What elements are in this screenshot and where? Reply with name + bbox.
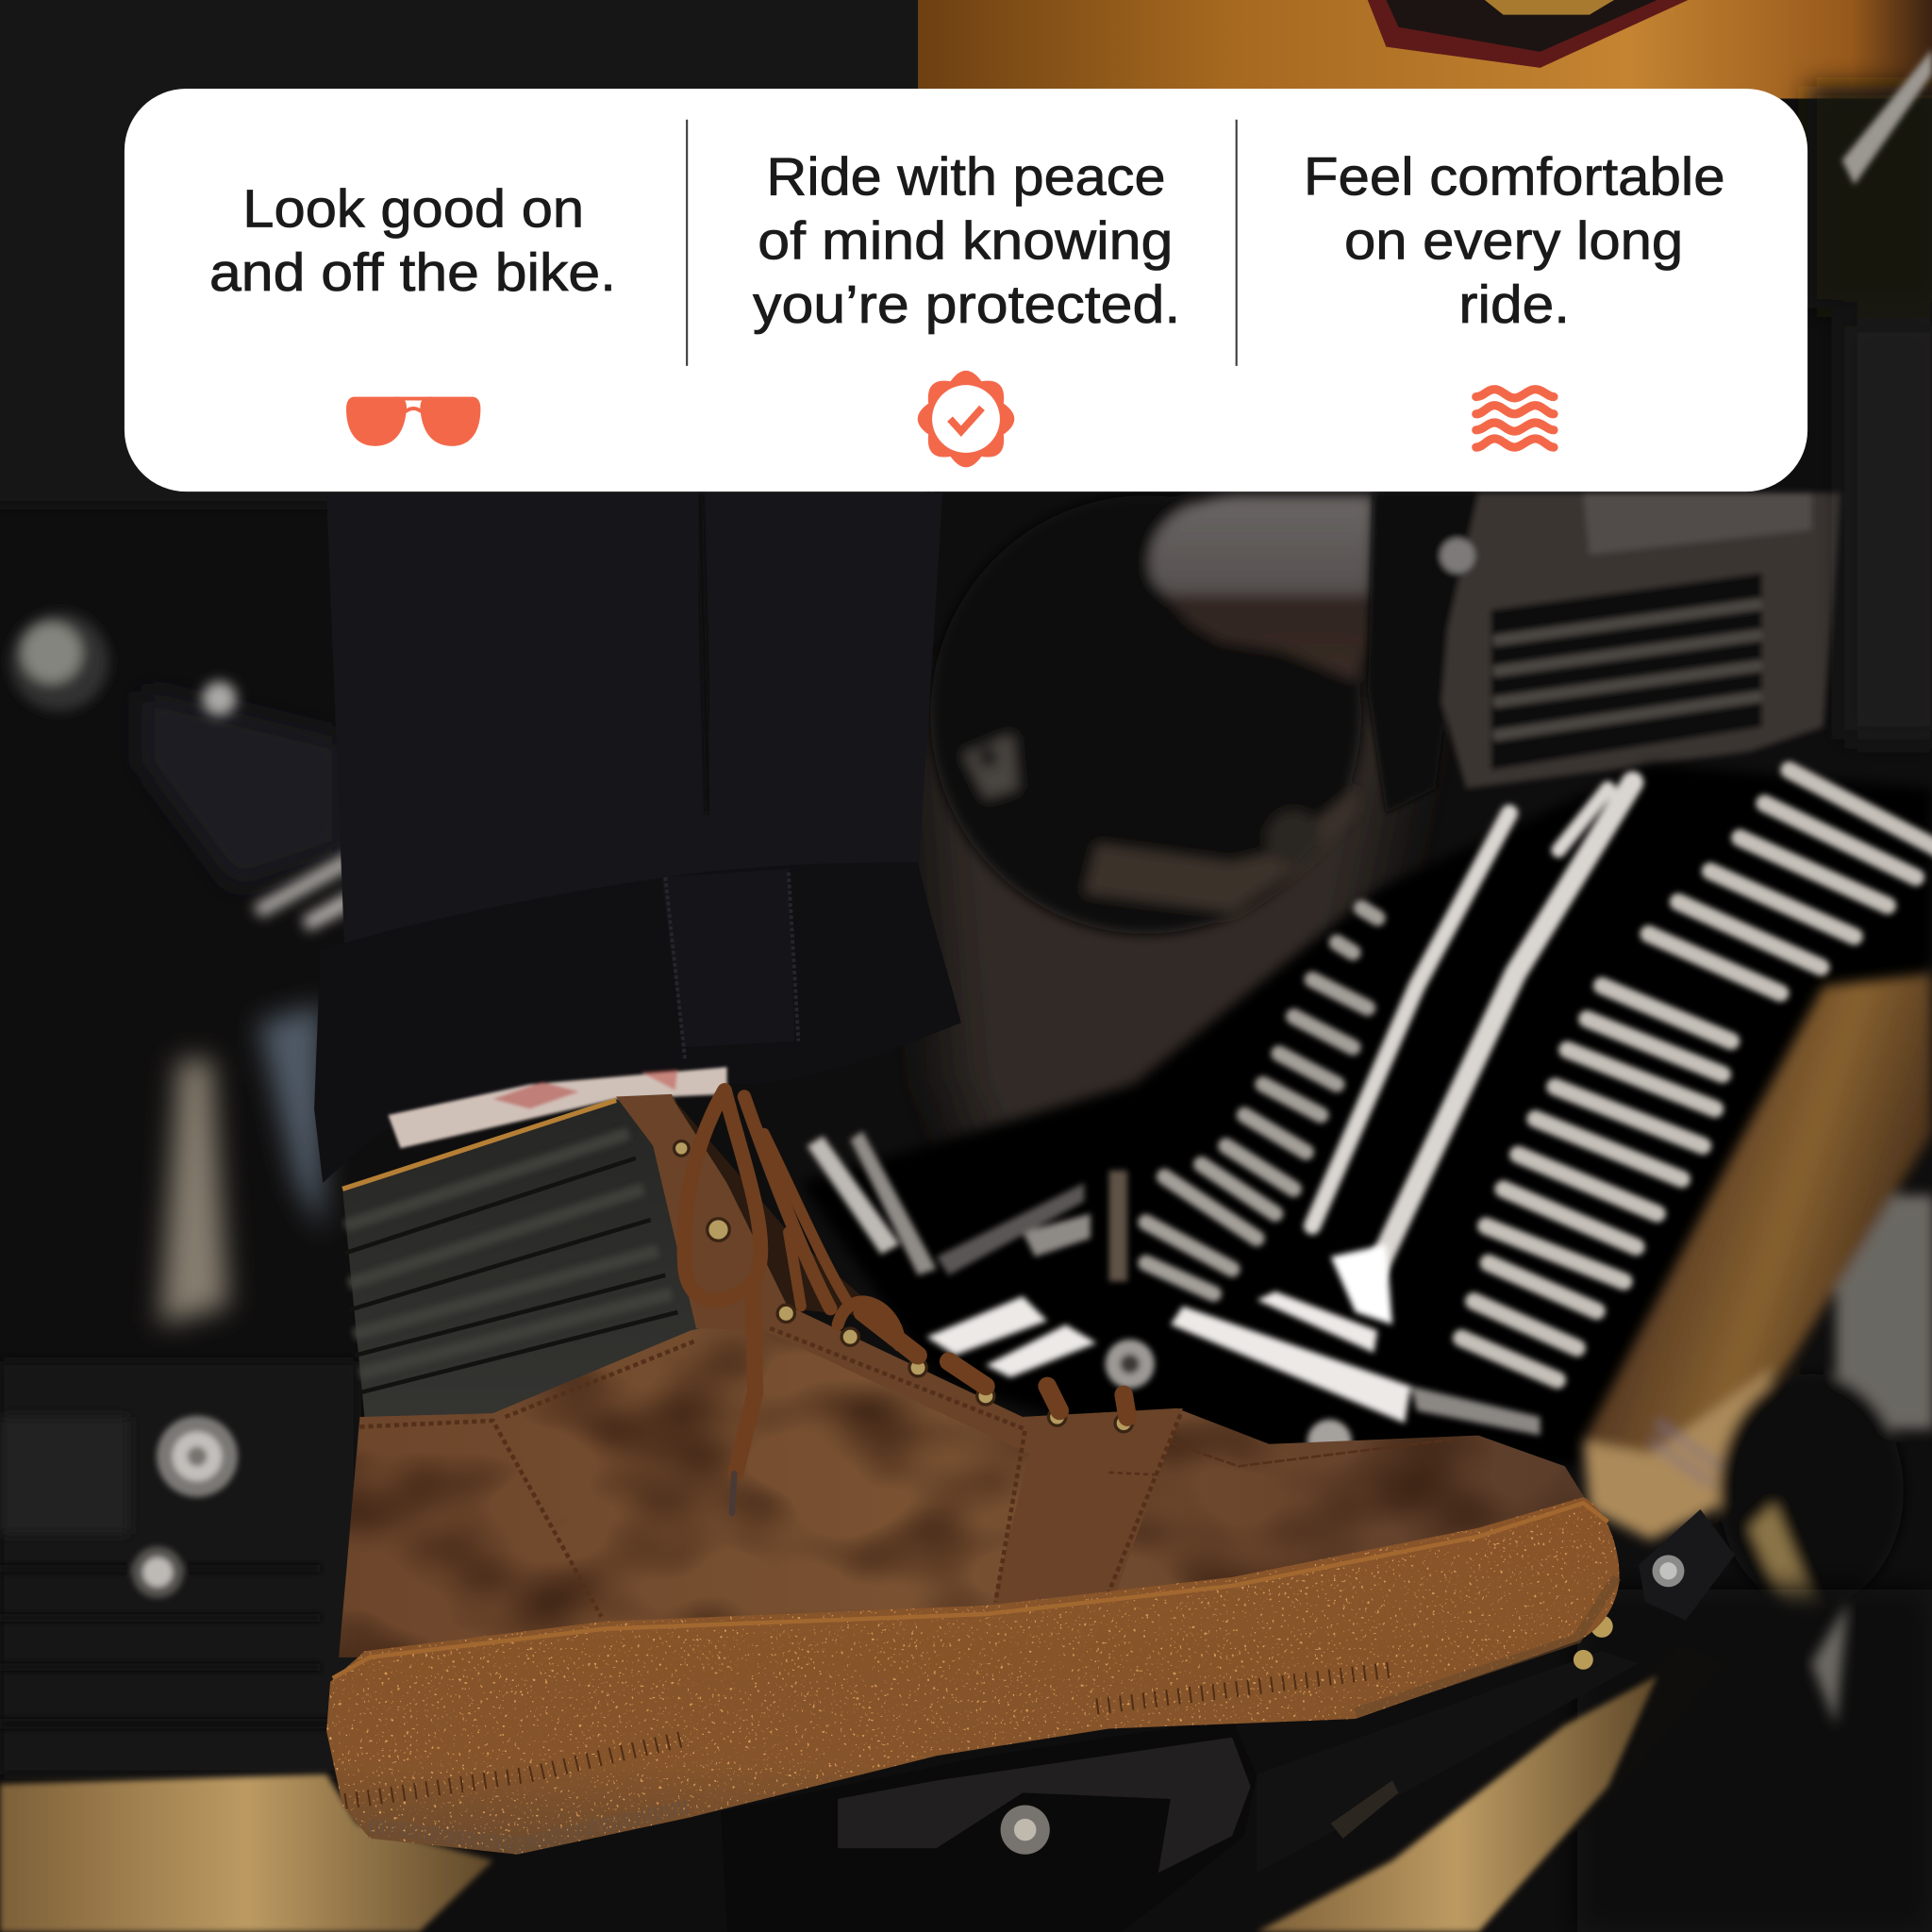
text: peace of mind: you’re protected. <box>753 275 1180 334</box>
foot peg bracket <box>1639 1509 1735 1621</box>
cylinder fins left column <box>1146 908 1377 1293</box>
text: comfort: ride. <box>1458 275 1570 334</box>
speckled sole <box>321 1491 1626 1860</box>
foot peg <box>721 1719 1257 1932</box>
jeans leg <box>326 492 942 961</box>
stitching seams <box>359 1328 1454 1617</box>
engine centre haze <box>918 690 1417 1244</box>
engine fin block, black <box>801 764 1932 1466</box>
leather upper <box>339 1328 1585 1657</box>
laces <box>684 1091 1127 1513</box>
rider jacket <box>0 0 930 506</box>
bronze exhaust pipe <box>1583 974 1932 1626</box>
jeans cuff <box>314 862 961 1183</box>
eyestay and tongue <box>616 1094 1183 1607</box>
text: peace of mind <box>753 146 1180 334</box>
pushrods <box>1312 782 1633 1275</box>
black upright bracket and air-filter block <box>1368 492 1842 813</box>
boot <box>321 1091 1626 1860</box>
text: peace of mind: Ride with peace <box>766 146 1166 206</box>
text: look good: Look good on <box>242 178 584 238</box>
text: comfort: Feel comfortable <box>1304 146 1725 206</box>
eyelets <box>674 1141 1132 1432</box>
text: peace of mind: of mind knowing <box>758 210 1173 270</box>
left engine parts <box>142 690 345 1324</box>
text: comfort <box>1304 146 1725 334</box>
text: comfort: on every long <box>1344 210 1683 270</box>
right edge dark engine <box>1807 86 1932 740</box>
text: look good: and off the bike. <box>209 242 616 302</box>
lower right frame and gold pipe <box>1257 1590 1932 1932</box>
icon: sunglasses <box>346 397 480 446</box>
sock <box>388 1067 727 1148</box>
padded black collar <box>342 1100 702 1420</box>
info card <box>125 89 1807 491</box>
gold exhaust lower left <box>0 1774 492 1932</box>
fuel tank <box>918 0 1932 98</box>
chrome lifter blocks <box>808 1131 1541 1464</box>
cylinder fins right <box>1461 770 1932 1380</box>
icon: check badge <box>918 371 1014 467</box>
text: look good <box>209 178 616 302</box>
lower left engine cover and bolts <box>0 1361 358 1774</box>
dark dome cover <box>930 495 1374 934</box>
icon: waves <box>1476 390 1554 447</box>
